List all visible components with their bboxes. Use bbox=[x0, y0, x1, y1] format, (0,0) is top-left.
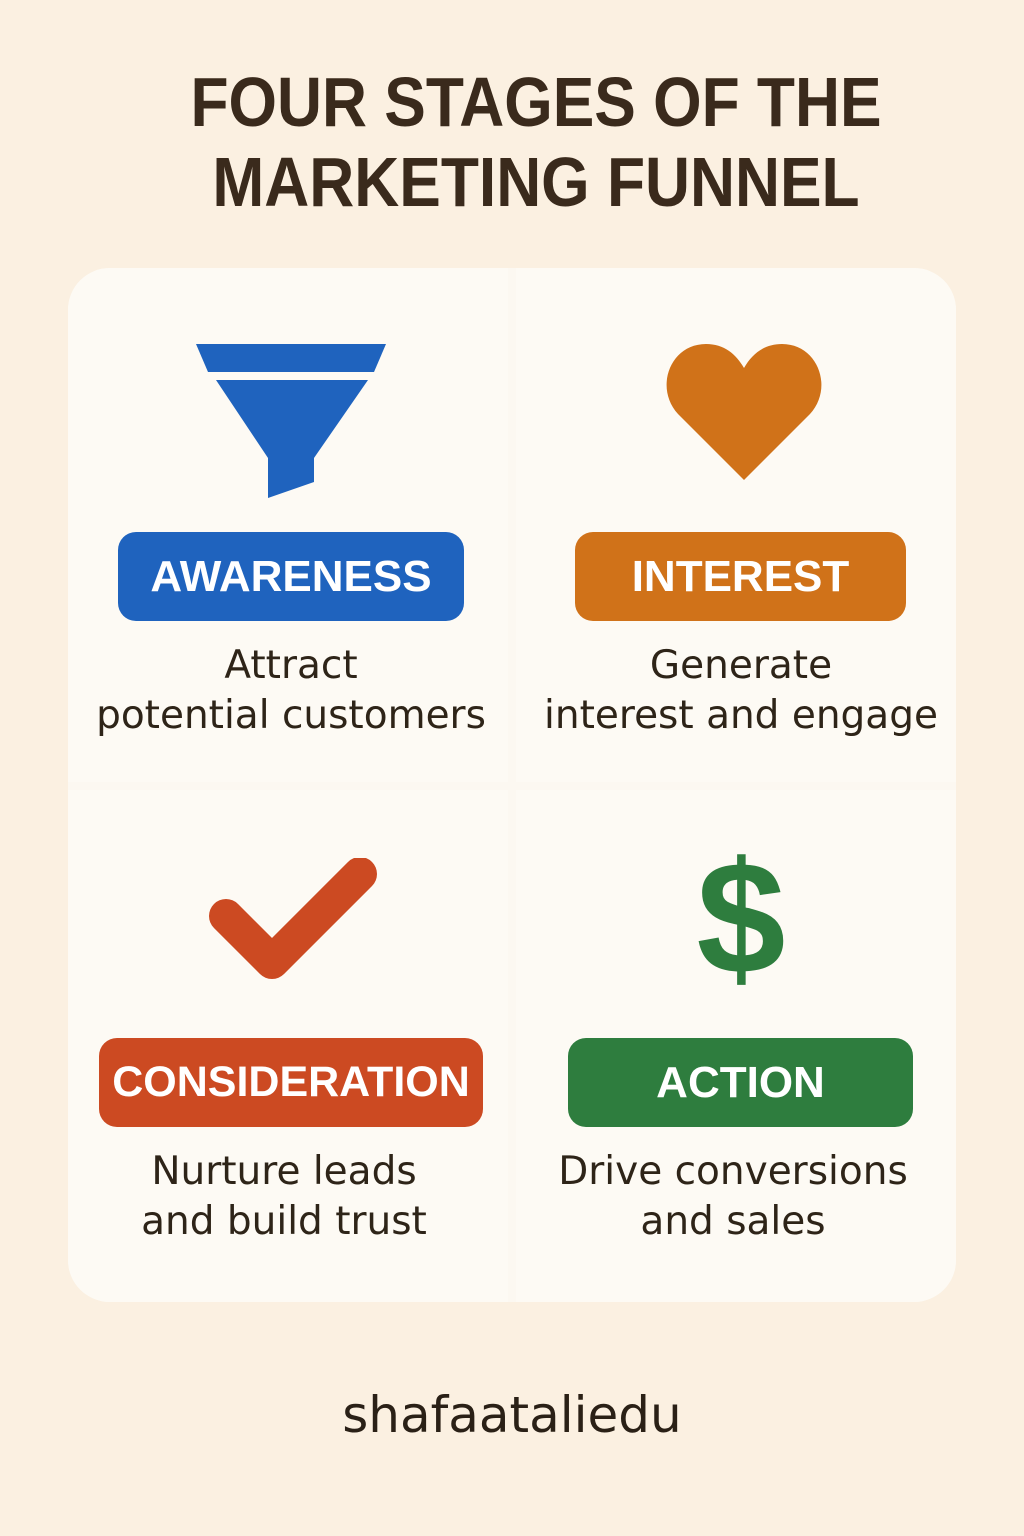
text: awareness description: potential customers bbox=[96, 693, 486, 738]
text: consideration description bbox=[141, 1149, 427, 1244]
panel: consideration bbox=[68, 790, 508, 1304]
title: FOUR STAGES OF THE bbox=[190, 63, 882, 141]
icon: heart bbox=[666, 344, 822, 480]
icon: dollar sign: $ bbox=[696, 828, 785, 1007]
title bbox=[190, 63, 882, 221]
text: awareness description bbox=[96, 643, 486, 738]
label: action bbox=[568, 1038, 913, 1127]
panel: interest bbox=[516, 268, 956, 782]
text: action description: and sales bbox=[640, 1199, 826, 1244]
text: interest description bbox=[544, 643, 938, 738]
label: consideration bbox=[99, 1038, 483, 1127]
text: interest description: Generate bbox=[650, 643, 832, 688]
label: awareness: AWARENESS bbox=[150, 552, 432, 601]
label: action: ACTION bbox=[656, 1058, 825, 1107]
text: consideration description: Nurture leads bbox=[151, 1149, 417, 1194]
text: awareness description: Attract bbox=[224, 643, 358, 688]
label: interest: INTEREST bbox=[632, 552, 849, 601]
text: interest description: interest and engage bbox=[544, 693, 938, 738]
title: MARKETING FUNNEL bbox=[212, 143, 860, 221]
icon: checkmark bbox=[209, 858, 377, 979]
icon: funnel bbox=[196, 344, 386, 498]
label: consideration: CONSIDERATION bbox=[112, 1058, 470, 1106]
label: awareness bbox=[118, 532, 464, 621]
panel: action bbox=[516, 790, 956, 1304]
panel: awareness bbox=[68, 268, 508, 782]
text: action description bbox=[558, 1149, 908, 1244]
footer: author: shafaataliedu bbox=[342, 1386, 682, 1444]
label: interest bbox=[575, 532, 906, 621]
text: consideration description: and build trust bbox=[141, 1199, 427, 1244]
text: action description: Drive conversions bbox=[558, 1149, 908, 1194]
panel: stages grid bbox=[68, 268, 956, 1302]
